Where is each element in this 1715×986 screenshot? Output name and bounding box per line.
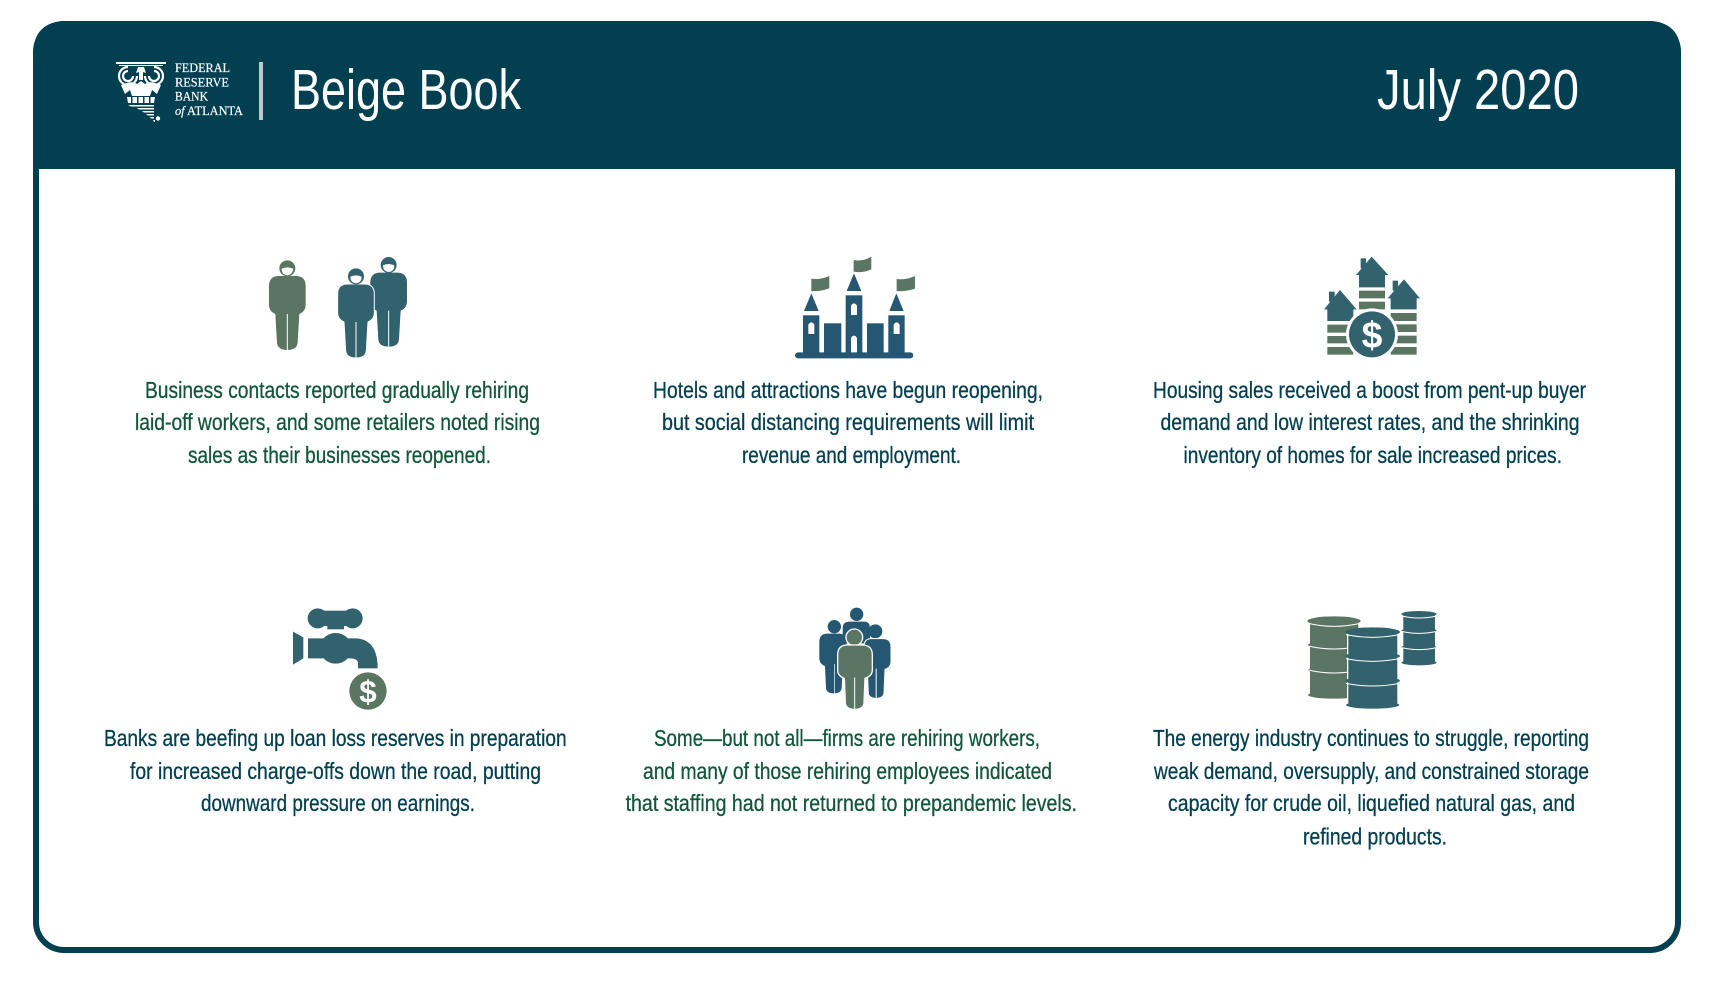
icon: faucet with dollar coin: $ [359,674,377,709]
text: firms rehiring: Some—but not all—firms are rehiring workers, [654,725,1040,751]
text: hotels and attractions: revenue and employment. [742,442,961,468]
icon: oil barrels [1307,611,1437,709]
logo: Federal Reserve Bank of Atlanta: BANK [175,88,209,104]
text: housing sales: Housing sales received a boost from pent-up buyer [1153,377,1586,403]
icon: houses and money: $ [1362,314,1383,356]
text: business contacts: laid-off workers, and some retailers noted rising [135,409,540,435]
text: banks: for increased charge-offs down the road, putting [130,758,541,784]
icon: masked workers [269,257,407,358]
logo: Federal Reserve Bank of Atlanta: RESERVE [175,74,229,90]
text: housing sales: demand and low interest rates, and the shrinking [1160,409,1580,435]
icon: castle [795,257,915,358]
icon: group of workers [819,608,891,709]
text: hotels and attractions: Hotels and attractions have begun reopening, [653,377,1043,403]
text: banks: downward pressure on earnings. [201,790,475,816]
text: firms rehiring: and many of those rehiring employees indicated [643,758,1052,784]
header band [33,21,1681,169]
text: banks [104,725,567,816]
logo: Federal Reserve Bank of Atlanta: FEDERAL [175,60,230,75]
text: energy industry [1153,725,1589,850]
text: housing sales: inventory of homes for sale increased prices. [1184,442,1562,468]
text: hotels and attractions: but social distancing requirements will limit [662,409,1034,435]
text: energy industry: The energy industry continues to struggle, reporting [1153,725,1589,751]
title: Beige Book [291,58,521,122]
text: business contacts: Business contacts reported gradually rehiring [145,377,529,403]
logo: Federal Reserve Bank of Atlanta [116,60,244,122]
text: firms rehiring [626,725,1077,816]
icon: houses and money [1324,257,1420,360]
logo divider [259,62,263,120]
text: energy industry: weak demand, oversupply, and constrained storage [1153,758,1589,784]
text: banks: Banks are beefing up loan loss reserves in preparation [104,725,567,751]
text: business contacts [135,377,540,468]
text: firms rehiring: that staffing had not returned to prepandemic levels. [626,790,1077,816]
date: July 2020 [1377,58,1579,122]
text: housing sales [1153,377,1586,468]
icon: faucet with dollar coin [293,608,387,710]
text: business contacts: sales as their businesses reopened. [188,442,491,468]
logo: Federal Reserve Bank of Atlanta: of ATLANTA [175,103,244,118]
text: hotels and attractions [653,377,1043,468]
text: energy industry: refined products. [1303,824,1447,850]
text: energy industry: capacity for crude oil, liquefied natural gas, and [1168,790,1575,816]
